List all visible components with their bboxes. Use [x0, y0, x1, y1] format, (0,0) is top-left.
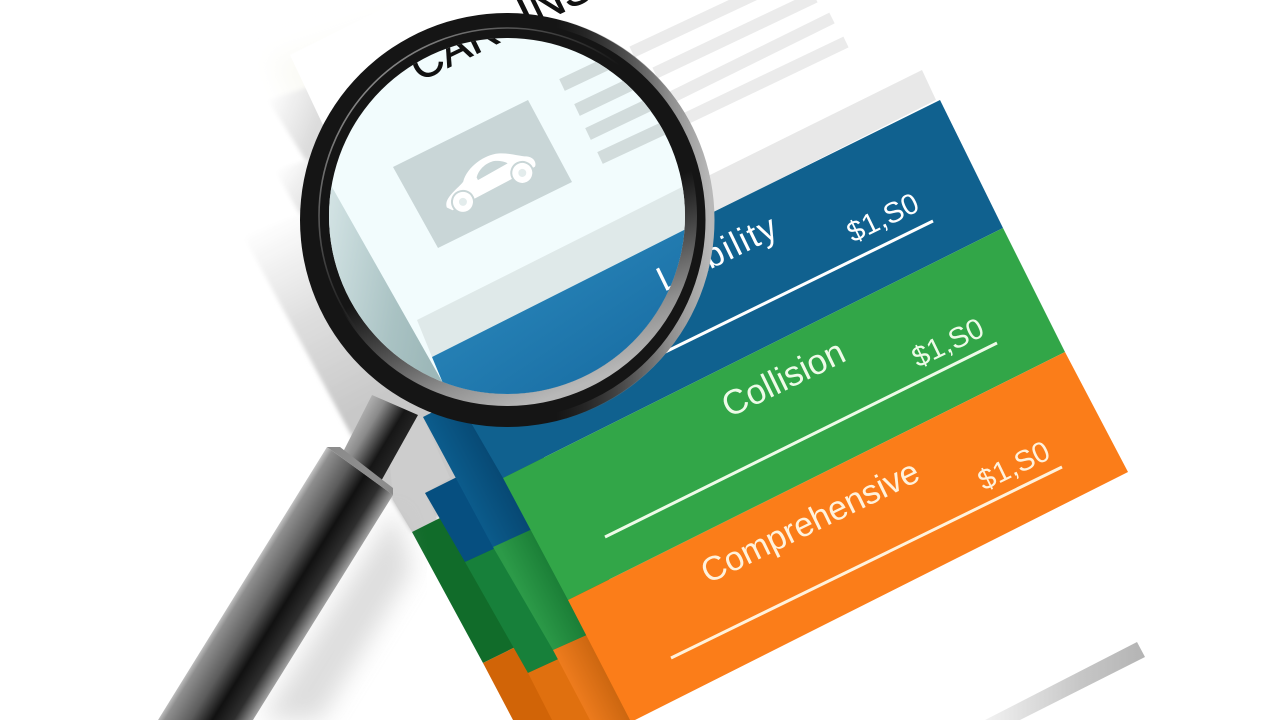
lens blue band	[432, 230, 684, 394]
magnifier handle	[158, 395, 418, 720]
comprehensive row	[671, 435, 1062, 658]
bottom gray strip	[985, 642, 1145, 720]
back sheet 3	[425, 458, 632, 720]
liability row: Liability	[650, 207, 785, 299]
comprehensive row: Comprehensive	[695, 453, 926, 591]
collision row: Collision	[715, 332, 851, 425]
back sheet 2	[423, 375, 632, 720]
lens glass	[320, 30, 700, 400]
magnified lens view	[329, 38, 685, 394]
lens header strip	[417, 187, 685, 357]
title fragment in lens: CAR	[402, 6, 507, 91]
lens text lines	[559, 62, 666, 164]
lens liability text fragment: L	[650, 256, 685, 299]
comprehensive row: $1,S0	[973, 435, 1055, 497]
photo placeholder with car	[393, 100, 572, 248]
collision row	[605, 312, 997, 537]
liability band	[430, 100, 1003, 478]
text lines on the policy	[632, 0, 846, 119]
collision band	[503, 228, 1065, 600]
liability row	[650, 187, 933, 357]
lens left shadow	[329, 186, 442, 382]
front policy sheet	[290, 0, 1128, 720]
handle shadow	[262, 510, 412, 720]
icon: car	[446, 153, 536, 212]
back sheet 4	[412, 498, 600, 720]
header strip	[417, 70, 936, 355]
stacked back sheets shadow	[243, 10, 470, 532]
collision row: $1,S0	[907, 312, 989, 374]
illustration: policy documents under magnifying glass	[158, 0, 1145, 720]
magnifier frame	[300, 13, 714, 427]
liability row: $1,S0	[842, 187, 924, 249]
comprehensive band	[568, 352, 1128, 720]
